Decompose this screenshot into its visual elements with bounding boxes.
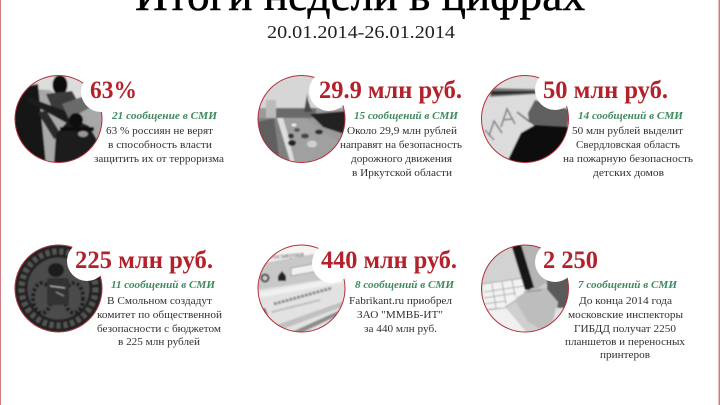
headline: 440 млн руб. <box>321 245 457 274</box>
panel: 63% <box>14 72 224 165</box>
description: московские инспекторы <box>568 310 683 321</box>
description: ГИБДД получат 2250 <box>574 324 676 335</box>
media count: 11 сообщений в СМИ <box>111 280 216 291</box>
headline: 225 млн руб. <box>75 245 213 274</box>
headline: 2 250 <box>543 245 598 274</box>
photo: emblem <box>14 241 107 332</box>
panel: 225 млн руб. <box>14 241 222 348</box>
description: в 225 млн рублей <box>118 337 200 348</box>
description: детских домов <box>593 168 664 179</box>
description: в Иркутской области <box>352 168 452 179</box>
photo: browser screen <box>258 244 346 332</box>
photo: tablet and hand <box>481 244 569 332</box>
description: на пожарную безопасность <box>563 154 693 165</box>
description <box>340 126 462 179</box>
description <box>565 296 686 361</box>
headline: 50 млн руб. <box>543 75 668 104</box>
description: планшетов и переносных <box>565 337 686 348</box>
headline: 63% <box>90 75 137 104</box>
description: за 440 млн руб. <box>364 324 437 335</box>
description <box>94 126 224 165</box>
description <box>97 296 222 348</box>
panel: 440 млн руб. <box>257 243 457 335</box>
description: Около 29,9 млн рублей <box>347 126 457 137</box>
description: принтеров <box>600 350 650 361</box>
photo: browser screen: госзакупки <box>270 250 305 261</box>
description: ЗАО "ММВБ-ИТ" <box>357 310 443 321</box>
description: комитет по общественной <box>97 310 222 321</box>
description: Свердловская область <box>576 140 680 151</box>
media count: 14 сообщений в СМИ <box>578 111 684 122</box>
media count: 8 сообщений в СМИ <box>355 280 455 291</box>
description: До конца 2014 года <box>579 296 672 307</box>
description: в способность власти <box>108 140 212 151</box>
description: дорожного движения <box>351 154 452 165</box>
photo: writing on wall <box>481 75 569 163</box>
description: В Смольном создадут <box>107 296 212 307</box>
description: защитить их от терроризма <box>94 154 224 165</box>
description: безопасности с бюджетом <box>97 324 221 335</box>
panel: 2 250 <box>480 242 686 361</box>
media count: 15 сообщений в СМИ <box>354 111 459 122</box>
description <box>349 296 452 335</box>
description: Fabrikant.ru приобрел <box>349 296 452 307</box>
description: направят на безопасность <box>340 140 462 151</box>
panel: 29.9 млн руб. <box>257 71 462 179</box>
photo: highway <box>257 71 349 164</box>
photo: armed men <box>14 75 102 163</box>
description: 50 млн рублей выделит <box>572 126 683 137</box>
headline: 29.9 млн руб. <box>319 75 462 104</box>
media count: 7 сообщений в СМИ <box>578 280 678 291</box>
panel: 50 млн руб. <box>480 70 693 179</box>
description: 63 % россиян не верят <box>106 126 213 137</box>
media count: 21 сообщение в СМИ <box>111 111 218 122</box>
description <box>563 126 693 179</box>
date range: 20.01.2014-26.01.2014 <box>267 22 455 42</box>
